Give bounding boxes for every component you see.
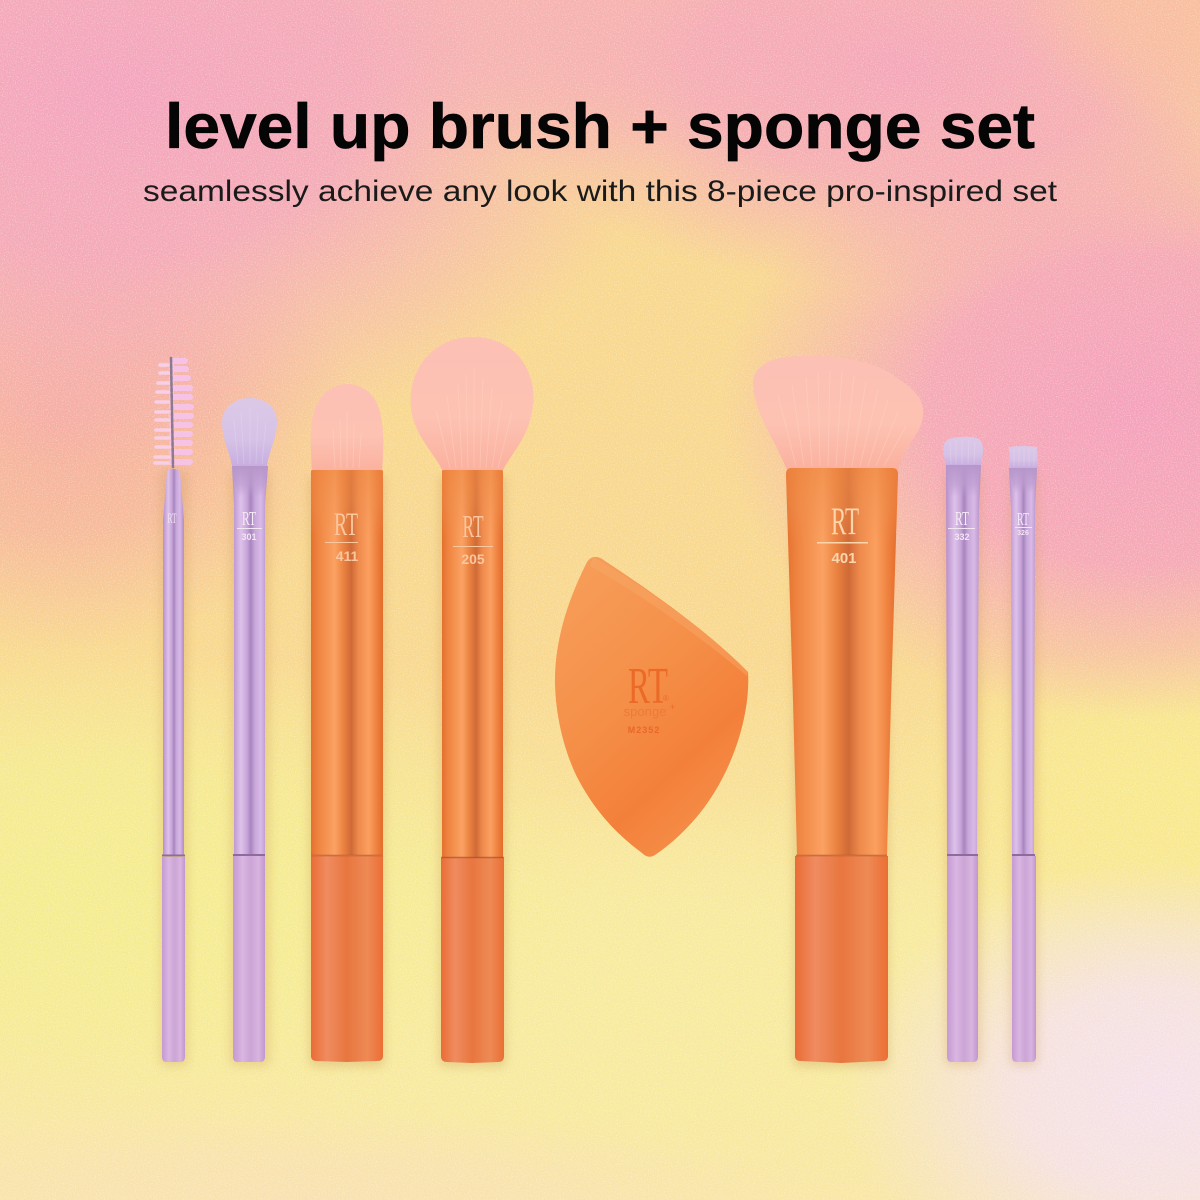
brush: 401: RT (831, 500, 859, 543)
brush: 401: 401 (831, 550, 857, 567)
hair (411, 337, 533, 472)
sponge: sponge (624, 704, 666, 719)
spoolie bristles (155, 358, 191, 467)
brush: 332 (943, 437, 983, 1066)
hair (1009, 446, 1038, 468)
brush: 411: RT (334, 507, 358, 543)
brush: 205: 205 (461, 551, 485, 567)
brush: 301: RT (242, 508, 256, 530)
hair (222, 398, 277, 466)
brush: spoolie (155, 358, 191, 1066)
brush: 205 (411, 337, 533, 1067)
brush: 401 (753, 356, 923, 1067)
brush: 326 (1009, 446, 1038, 1066)
sponge (555, 557, 748, 857)
sponge: + (670, 702, 675, 712)
sponge: M2352 (628, 725, 660, 735)
hair (311, 384, 383, 472)
sponge: RT (628, 658, 668, 715)
brush: 326: 326 (1017, 530, 1029, 537)
brush: 332: RT (955, 508, 969, 530)
brush: 326: RT (1017, 509, 1029, 529)
sponge: ® (663, 694, 669, 703)
brush: spoolie: RT (168, 511, 176, 527)
subtitle: seamlessly achieve any look with this 8-piece pro-inspired set (143, 175, 1058, 208)
title: level up brush + sponge set (165, 92, 1035, 162)
hair (943, 437, 983, 466)
brush: 411 (309, 384, 385, 1067)
brush: 205: RT (462, 508, 484, 544)
brush: 411: 411 (336, 548, 359, 564)
brush: 301: 301 (241, 532, 257, 542)
hair (753, 356, 923, 470)
brush: 332: 332 (954, 532, 970, 542)
brush: 301 (222, 398, 277, 1066)
